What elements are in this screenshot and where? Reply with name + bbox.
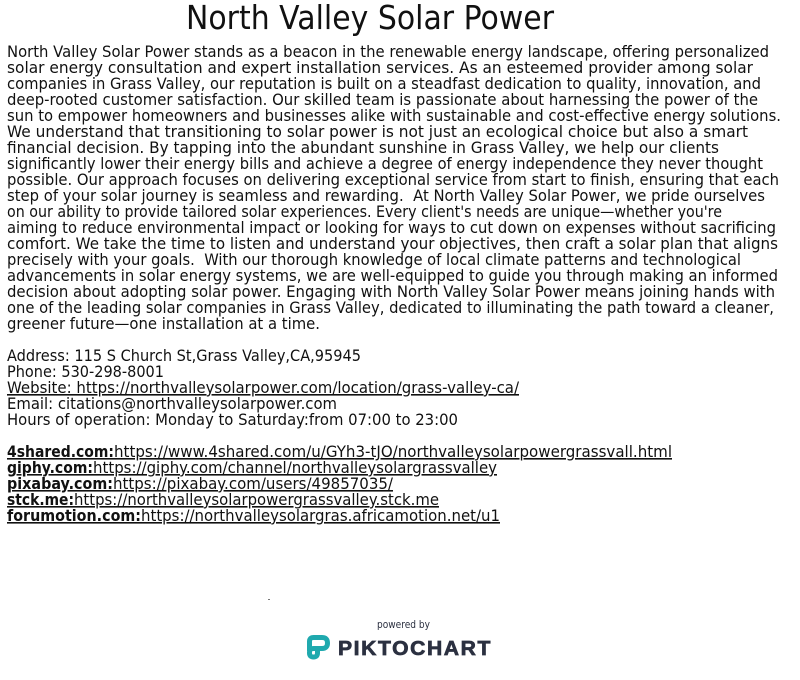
text block: company description: greener future—one installation at a time. [7, 314, 320, 333]
text block: citation links: https://giphy.com/channel/northvalleysolargrassvalley [93, 458, 497, 477]
text block: citation links: forumotion.com: [7, 506, 141, 525]
powered by label: powered by [377, 618, 430, 631]
text block: contact details: Address: 115 S Church St,Grass Valley,CA,95945 [7, 346, 361, 365]
text block: citation links: https://pixabay.com/users/49857035/ [113, 474, 394, 493]
text block: company description: companies in Grass Valley, our reputation is built on a steadfast dedication to quality, innovation, and [7, 74, 761, 93]
text block: contact details: Phone: 530-298-8001 [7, 362, 164, 381]
text block: citation links: pixabay.com: [7, 474, 113, 493]
text block: contact details [7, 346, 520, 429]
text block: contact details: Hours of operation: Monday to Saturday:from 07:00 to 23:00 [7, 410, 458, 429]
text block: company description: deep-rooted customer satisfaction. Our skilled team is passionate about harnessing the power of the [7, 90, 758, 109]
text block: citation links: https://www.4shared.com/u/GYh3-tJO/northvalleysolarpowergrassvall.html [114, 442, 672, 461]
text block: citation links: 4shared.com: [7, 442, 114, 461]
text block: company description [7, 42, 781, 333]
text block: company description: solar energy consultation and expert installation services. As an esteemed provider among solar [7, 58, 753, 77]
text block: citation links: giphy.com: [7, 458, 93, 477]
text block: citation links: stck.me: [7, 490, 74, 509]
icon: Piktochart logo mark [310, 638, 328, 657]
logo wordmark: PIKTOCHART [338, 638, 492, 660]
text block: citation links: https://northvalleysolargras.africamotion.net/u1 [141, 506, 500, 525]
text block: company description: on our ability to provide tailored solar experiences. Every client's needs are unique—whether you're [7, 202, 722, 221]
text block: company description: We understand that transitioning to solar power is not just an ecological choice but also a smart [7, 122, 748, 141]
text block: contact details: Email: citations@northvalleysolarpower.com [7, 394, 337, 413]
text block: citation links: https://northvalleysolarpowergrassvalley.stck.me [74, 490, 439, 509]
text block: company description: precisely with your goals. With our thorough knowledge of local climate patterns and technological [7, 250, 741, 269]
text block: contact details: Website: https://northvalleysolarpower.com/location/grass-valley-ca/ [7, 378, 520, 397]
small dot mark [268, 599, 270, 600]
text block: citation links [7, 442, 672, 525]
text block: company description: financial decision. By tapping into the abundant sunshine in Grass Valley, we help our clients [7, 138, 719, 157]
text block: company description: comfort. We take the time to listen and understand your objectives, then craft a solar plan that aligns [7, 234, 778, 253]
